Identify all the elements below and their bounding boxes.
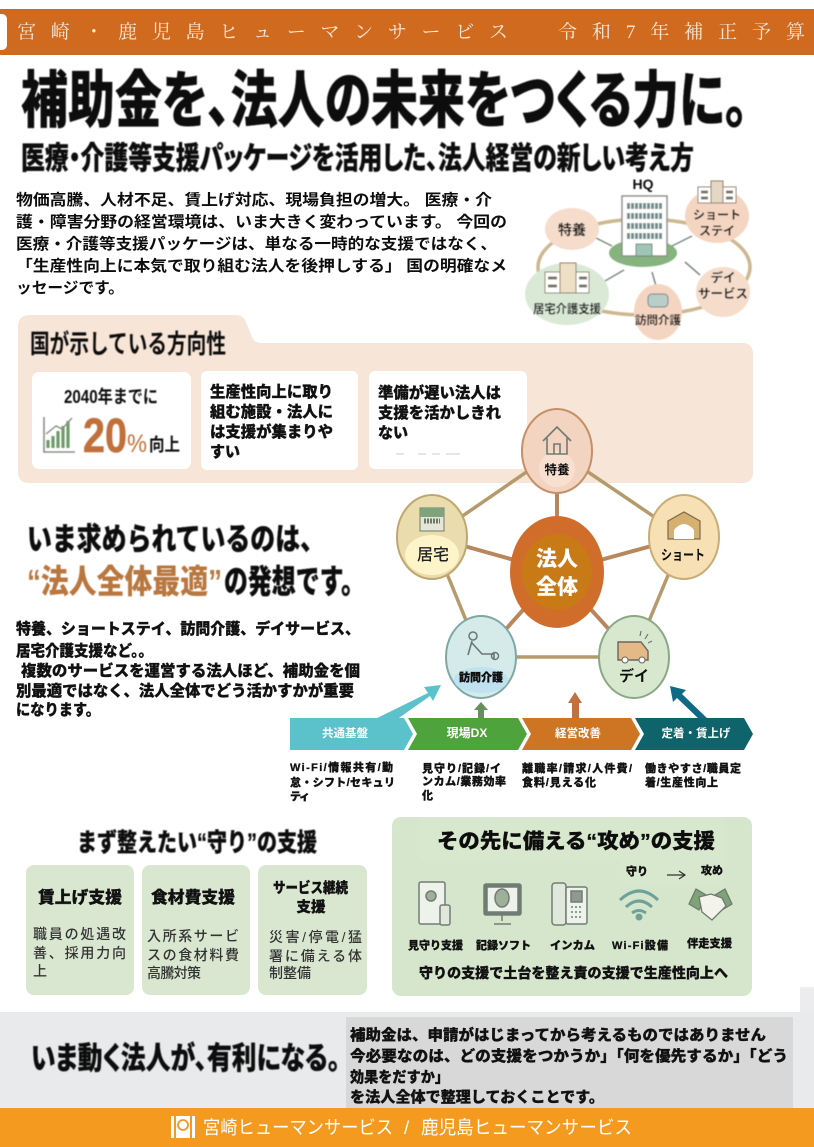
card: 2040年までに20%向上: % <box>127 430 147 458</box>
stage: 現場DX: 現場DX <box>447 725 487 740</box>
HQ network diagram <box>525 176 750 340</box>
icon labels: 見守り支援 <box>408 938 463 952</box>
icon: handshake <box>689 889 732 920</box>
card: 食材費支援: スの食材料費 <box>147 947 239 963</box>
node: 特養 <box>545 208 599 250</box>
node: 法人全体: 全体 <box>536 576 578 599</box>
footer text: 宮崎ヒューマンサービス <box>203 1117 393 1138</box>
intro text block: 「生産性向上に本気で取り組む法人を後押しする」 国の明確なメ <box>16 256 507 275</box>
note: 定着・賃上げ <box>645 761 741 789</box>
node: 訪問介護: 訪問介護 <box>459 670 503 684</box>
card: 賃上げ支援 <box>26 865 134 995</box>
callout: 今必要なこと: 補助金は、申請がはじまってから考えるものではありません <box>350 1026 766 1044</box>
card: 準備が遅い法人 <box>369 371 527 469</box>
stage: 定着・賃上げ: 定着・賃上げ <box>662 726 731 740</box>
callout: 今必要なこと: 今必要なのは、どの支援をつかうか」「何を優先するか」「どう <box>350 1047 788 1065</box>
node: 居宅介護支援 <box>525 263 609 325</box>
node: 居宅 <box>397 495 467 579</box>
note: 共通基盤: ティ <box>290 790 310 803</box>
heading: 法人全体最適 <box>27 522 365 600</box>
card: 2040年までに20%向上: 2040年までに <box>64 386 158 407</box>
card: 生産性向上に取り組む: 生産性向上に取り <box>210 382 333 401</box>
heading: 法人全体最適: いま求められているのは、 <box>27 522 325 557</box>
header band: 令和7年補正予算 <box>558 21 805 43</box>
card: 準備が遅い法人: ない <box>378 424 408 442</box>
note: 現場DX: 化 <box>422 788 433 802</box>
panel caption: 守りの支援で土台を整え責の支援で生産性向上へ <box>419 965 728 981</box>
card: 準備が遅い法人: 準備が遅い法人は <box>378 383 501 402</box>
node: 居宅: 居宅 <box>417 546 449 564</box>
card: 生産性向上に取り組む: は支援が集まりや <box>210 422 333 441</box>
card: サービス継続支援: 支援 <box>296 898 326 916</box>
stage: 経営改善 <box>522 718 640 750</box>
icon: tablet <box>419 882 450 925</box>
note: 現場DX <box>422 761 506 802</box>
node: ショートステイ: ショート <box>693 208 741 222</box>
arrow: 現場DX to 訪問介護 <box>474 702 488 720</box>
note: 経営改善 <box>522 761 632 789</box>
node: 訪問介護 <box>634 284 682 340</box>
bottom band <box>0 987 814 1108</box>
header band: 宮崎・鹿児島ヒューマンサービス <box>17 21 508 43</box>
node: 特養: 特養 <box>558 222 586 238</box>
icon: HQ building <box>622 196 667 256</box>
footer text <box>203 1117 632 1138</box>
header band <box>0 9 814 55</box>
panel: 国が示している方向性 <box>18 315 753 483</box>
intro text block: 護・障害分野の経営環境は、いま大きく変わっています。 今回の <box>16 212 507 231</box>
card: 生産性向上に取り組む: すい <box>210 443 240 461</box>
node: デイサービス: デイ <box>710 270 736 285</box>
icon labels: 伴走支援 <box>687 936 732 950</box>
icon: company logo <box>171 1116 195 1138</box>
card: サービス継続支援: サービス継続 <box>273 879 348 897</box>
card: 食材費支援 <box>142 865 250 995</box>
stage notes <box>290 760 741 803</box>
card: 食材費支援: 食材費支援 <box>151 887 236 907</box>
text block: 法人全体の説明: 複数のサービスを運営する法人ほど、補助金を個 <box>21 661 360 680</box>
text block: 法人全体の説明: 居宅介護支援など。。 <box>16 641 153 660</box>
icon labels: Wi-Fi設備 <box>612 938 668 952</box>
card: 準備が遅い法人: 支援を活かしきれ <box>378 403 501 422</box>
intro text block: 物価高騰、人材不足、賃上げ対応、現場負担の増大。 医療・介 <box>16 190 493 209</box>
icon: monitor <box>484 884 521 924</box>
note: 共通基盤 <box>290 760 395 803</box>
footer text: 鹿児島ヒューマンサービス <box>421 1117 632 1138</box>
callout: 今必要なこと: 効果をだすか」 <box>350 1069 449 1086</box>
stage: 経営改善: 経営改善 <box>555 726 601 740</box>
card: サービス継続支援: 災害/停電/猛 <box>269 929 362 945</box>
card: 賃上げ支援: 上 <box>33 963 47 979</box>
card: 賃上げ支援: 職員の処遇改 <box>33 926 126 942</box>
heading: 守りの支援: まず整えたい“守り”の支援 <box>77 828 317 857</box>
arrow: 共通基盤 to 訪問介護 <box>373 685 441 720</box>
icon: phone <box>552 883 587 925</box>
intro text block <box>16 190 507 297</box>
card: サービス継続支援 <box>258 865 367 995</box>
note: 定着・賃上げ: 着/生産性向上 <box>645 775 718 789</box>
icon labels: 記録ソフト <box>476 938 531 952</box>
heading: 法人全体最適: “法人全体最適” <box>27 563 222 600</box>
callout: 今必要なこと <box>346 1017 793 1108</box>
intro text block: 医療・介護等支援パッケージは、単なる一時的な支援ではなく、 <box>16 234 497 253</box>
card: 食材費支援: 高騰対策 <box>147 965 201 981</box>
node: 訪問介護 <box>446 616 516 698</box>
pentagon diagram: 法人全体 <box>397 409 719 698</box>
node: 法人全体: 法人 <box>536 548 578 571</box>
footer text: / <box>404 1117 410 1138</box>
icon labels: インカム <box>550 939 595 952</box>
label: 守りから攻めへ: 攻め <box>701 863 723 877</box>
arrow: 定着・賃上げ to デイ <box>670 686 709 720</box>
label: 守りから攻めへ: 守り <box>626 864 648 878</box>
card: サービス継続支援: 署に備える体 <box>269 948 362 964</box>
node: デイ <box>599 616 669 698</box>
note: 共通基盤: 怠・シフト/セキュリ <box>290 775 395 789</box>
card: 賃上げ支援: 賃上げ支援 <box>38 887 123 907</box>
node: 法人全体 <box>510 516 604 628</box>
node: ショート: ショート <box>661 547 705 563</box>
text block: 法人全体の説明 <box>16 619 360 719</box>
icon labels <box>408 936 732 952</box>
node: デイサービス <box>696 267 750 317</box>
card: 食材費支援: 入所系サービ <box>147 928 239 944</box>
stage: 共通基盤 <box>290 718 413 750</box>
HQ network diagram: HQ <box>632 176 654 192</box>
note: 現場DX: ンカム/業務効率 <box>422 774 506 788</box>
text block: 法人全体の説明: になります。 <box>16 701 100 719</box>
text block: 法人全体の説明: 特養、ショートステイ、訪問介護、デイサービス、 <box>16 619 360 638</box>
label: 守りから攻めへ <box>626 863 723 879</box>
panel: 攻めの支援 <box>392 817 752 996</box>
card: 生産性向上に取り組む <box>201 371 358 470</box>
arrow: 経営改善 to center <box>568 692 582 720</box>
ribbon: four stages <box>290 718 753 750</box>
node: 訪問介護: 訪問介護 <box>635 313 681 327</box>
node: 特養: 特養 <box>544 462 570 477</box>
stage: 現場DX <box>408 718 527 750</box>
node: ショートステイ <box>685 181 749 243</box>
stage: 定着・賃上げ <box>635 718 753 750</box>
card: 2040年までに20%向上 <box>32 372 191 469</box>
text block: 法人全体の説明: 別最適ではなく、法人全体でどう活かすかが重要 <box>16 681 354 700</box>
node: デイ: デイ <box>619 667 649 685</box>
note: 現場DX: 見守り/記録/イ <box>422 761 501 775</box>
card: 生産性向上に取り組む: 組む施設・法人に <box>210 402 333 421</box>
node: ショート <box>649 495 719 579</box>
footer band <box>0 1108 814 1147</box>
node: デイサービス: サービス <box>698 286 748 301</box>
note: 共通基盤: Wi-Fi/情報共有/勤 <box>290 760 393 774</box>
note: 経営改善: 食料/見える化 <box>522 775 596 789</box>
stage: 共通基盤: 共通基盤 <box>322 726 368 740</box>
node: 居宅介護支援: 居宅介護支援 <box>533 301 601 316</box>
card: 賃上げ支援: 善、採用力向 <box>33 945 126 961</box>
callout: 今必要なこと: を法人全体で整理しておくことです。 <box>350 1088 604 1106</box>
card: 2040年までに20%向上: 20 <box>83 410 127 463</box>
intro text block: ッセージです。 <box>16 279 124 297</box>
heading: 国が示している方向性: 国が示している方向性 <box>30 329 226 359</box>
icon: wifi <box>620 891 658 920</box>
card: サービス継続支援: 制整備 <box>269 965 311 981</box>
note: 経営改善: 離職率/請求/人件費/ <box>522 761 632 775</box>
heading: 法人全体最適: の発想です。 <box>224 563 365 600</box>
node: 特養 <box>522 409 592 493</box>
note: 定着・賃上げ: 働きやすさ/職員定 <box>645 761 741 775</box>
heading: その先に備える攻めの支援: その先に備える“攻め”の支援 <box>437 829 716 853</box>
card: 2040年までに20%向上: 向上 <box>149 435 180 455</box>
node: ショートステイ: ステイ <box>699 224 735 238</box>
headline: いま動く法人が、有利になる。: いま動く法人が、有利になる。 <box>31 1041 340 1076</box>
